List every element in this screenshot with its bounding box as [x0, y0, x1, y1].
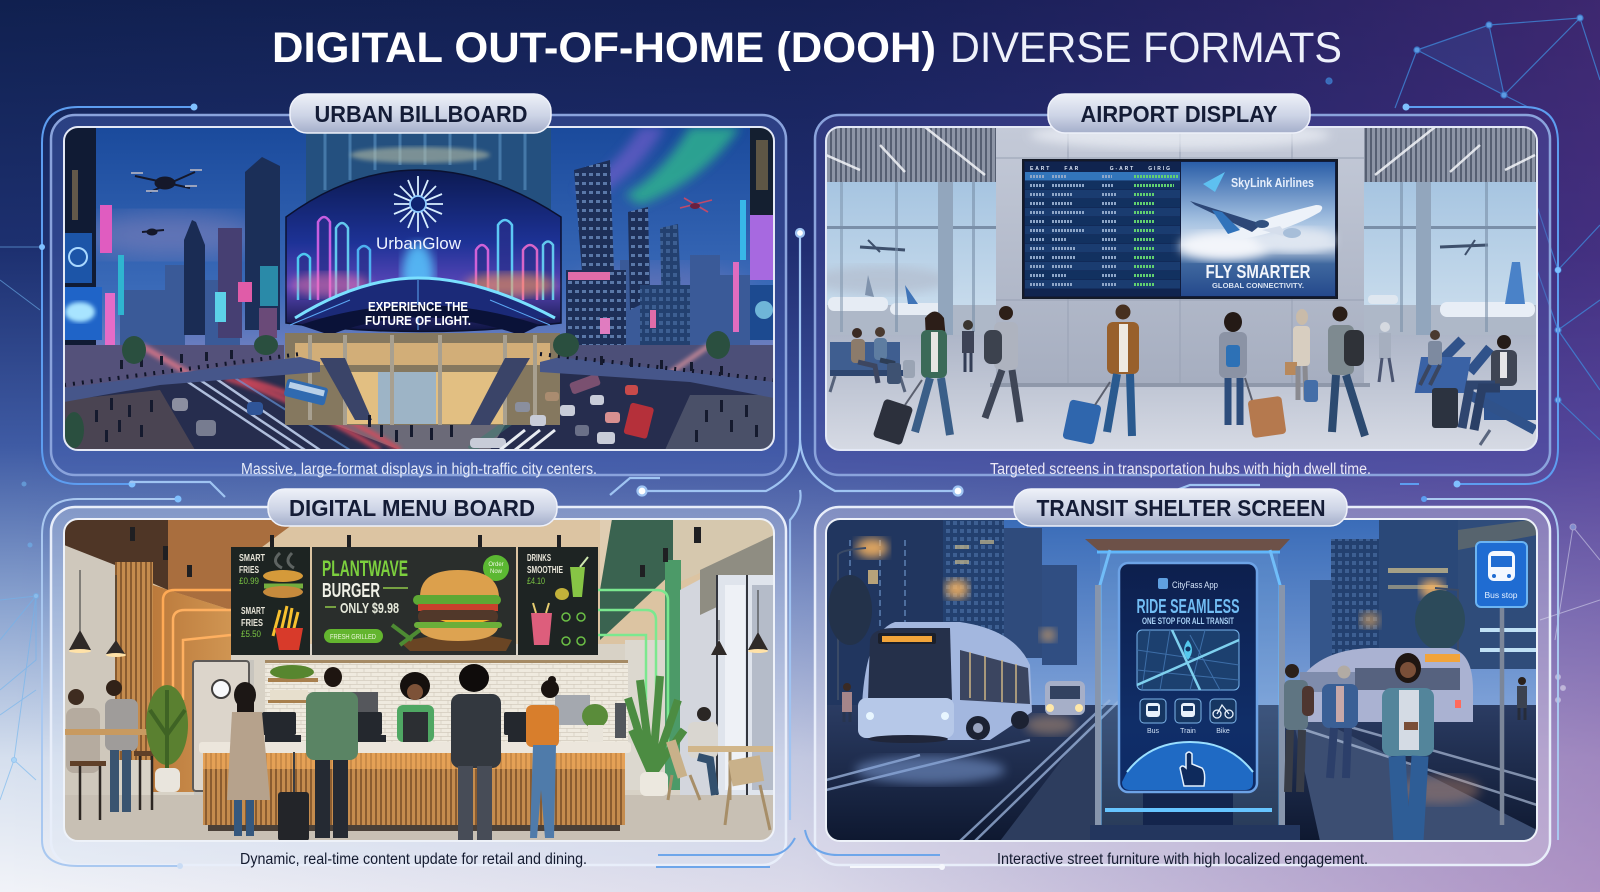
curved billboard screen — [286, 170, 561, 335]
interactive screen: ONE STOP FOR ALL TRANSIT — [1142, 616, 1234, 626]
menu board main: FRESH GRILLED — [330, 632, 376, 641]
menu board left: £5.50 — [241, 629, 261, 639]
caption: transit shelter screen: Interactive street furniture with high localized engagement. — [997, 851, 1368, 868]
network decoration: top right — [1326, 15, 1600, 440]
trees — [64, 331, 730, 448]
menu board left: FRIES — [241, 618, 263, 629]
menu board main: Order — [488, 562, 504, 568]
neon signs and side screens — [64, 200, 774, 348]
traveller: man in brown jacket — [1062, 304, 1139, 445]
neon skyline on screen — [298, 217, 553, 300]
title — [272, 24, 1342, 72]
connectors: central cross — [130, 229, 1260, 820]
city bus — [858, 622, 1032, 743]
crowds — [80, 350, 758, 442]
neon lines — [163, 590, 668, 750]
panel frame: airport display — [815, 104, 1561, 488]
customer: man green sweater — [306, 667, 358, 838]
flight table: EART FAR G-ART GIRIG — [1030, 166, 1170, 172]
bridges — [64, 354, 774, 425]
interactive screen: RIDE SEAMLESS — [1136, 596, 1240, 618]
airline ad: FLY SMARTER — [1206, 262, 1310, 282]
background pedestrian right — [1517, 677, 1527, 720]
ceiling — [64, 519, 774, 644]
title: DIVERSE FORMATS — [950, 24, 1342, 72]
airport seating left — [830, 327, 915, 392]
sky clouds and aurora — [80, 127, 750, 315]
caption: airport display: Targeted screens in transportation hubs with high dwell time. — [990, 461, 1371, 478]
customer: man dark sweater — [451, 664, 501, 840]
panel frame: digital menu board — [42, 496, 795, 869]
curved billboard screen: UrbanGlow — [376, 234, 462, 253]
register screens — [262, 712, 540, 743]
flight board screen — [1023, 160, 1337, 298]
traveller: background woman — [1285, 309, 1318, 402]
service counter — [199, 742, 631, 831]
table and chairs — [666, 739, 774, 830]
network decoration: left side — [0, 247, 42, 800]
airline ad: GLOBAL CONNECTIVITY. — [1212, 281, 1304, 290]
commuter: man with backpack — [1284, 664, 1314, 792]
airfield outside windows — [810, 240, 1537, 335]
plant right — [628, 676, 684, 796]
menu board main: Now — [490, 569, 503, 575]
mode icons: Bus — [1147, 728, 1160, 735]
street lights and trees — [828, 538, 1465, 700]
frame: billboard image edge — [64, 127, 774, 450]
menu board left: SMART — [241, 606, 265, 617]
airline ad — [1180, 162, 1335, 296]
floor — [64, 795, 774, 841]
transit map — [1137, 630, 1239, 690]
barista — [397, 672, 434, 744]
drones — [131, 170, 712, 235]
heading pill: urban billboard: URBAN BILLBOARD — [314, 101, 528, 127]
airline ad: SkyLink Airlines — [1231, 175, 1314, 190]
interactive screen: CityFass App — [1172, 580, 1218, 591]
panel: digital menu board scene — [64, 519, 774, 841]
wet road — [826, 700, 1537, 841]
mall base — [285, 333, 560, 425]
frame: airport image edge — [826, 127, 1537, 450]
heading pill: airport display: AIRPORT DISPLAY — [1080, 101, 1278, 127]
heading pill: digital menu board: DIGITAL MENU BOARD — [289, 495, 535, 521]
mode icons — [1140, 699, 1236, 735]
left and right walls — [64, 535, 774, 810]
bus stop sign — [1476, 542, 1527, 825]
title: DIGITAL OUT-OF-HOME (DOOH) — [272, 24, 936, 72]
window mullions — [826, 165, 1537, 340]
mode icons: Train — [1180, 728, 1196, 735]
airplane — [1190, 201, 1322, 240]
menu board left — [231, 547, 310, 655]
floor — [826, 335, 1537, 450]
curved billboard screen: FUTURE OF LIGHT. — [365, 314, 471, 328]
panel frame: transit shelter screen — [805, 484, 1558, 870]
menu board left: FRIES — [239, 565, 259, 576]
plaza and roads — [64, 345, 774, 450]
mode icons: Bike — [1216, 728, 1230, 735]
distant traveller right — [1379, 322, 1393, 382]
customer: woman orange top — [526, 676, 559, 838]
airport seating right — [1415, 330, 1537, 445]
heading pill: transit shelter screen — [1014, 489, 1347, 526]
menu board left: SMART — [239, 553, 265, 564]
menu board left: £0.99 — [239, 576, 259, 586]
hero burger — [392, 570, 512, 651]
pedestrian by bus — [842, 683, 852, 722]
city buildings — [826, 519, 1537, 709]
interactive screen — [1119, 563, 1257, 792]
frame: transit image edge — [826, 519, 1537, 841]
heading pill: digital menu board — [268, 489, 557, 526]
slatted ceilings — [826, 127, 1537, 182]
menu board main — [312, 547, 516, 655]
suitcase — [278, 752, 309, 841]
traveller: man with backpack — [984, 306, 1020, 422]
menu board right: DRINKS — [527, 553, 551, 564]
central tower — [306, 128, 551, 210]
frame: menu image edge — [64, 519, 774, 841]
customer: woman beige coat — [227, 682, 270, 836]
bus stop sign: Bus stop — [1484, 590, 1518, 600]
left table patrons — [64, 680, 158, 820]
right seated man — [688, 707, 718, 795]
second bus — [1300, 648, 1473, 722]
bus shelter — [1085, 539, 1300, 841]
menu board main: PLANTWAVE — [322, 556, 408, 581]
ceiling track lights — [130, 527, 701, 577]
distant car — [1045, 681, 1085, 715]
plant left — [146, 685, 188, 792]
panel: urban billboard scene — [64, 127, 774, 450]
pendant lamps — [69, 570, 768, 657]
menu board main: ONLY $9.98 — [340, 600, 399, 617]
commuter: woman with phone — [1382, 653, 1434, 841]
heading pill: airport display — [1048, 94, 1310, 133]
menu board main: BURGER — [322, 580, 380, 602]
menu board right: £4.10 — [527, 576, 545, 586]
panel frame: urban billboard — [39, 104, 786, 488]
panel: transit shelter scene — [826, 519, 1537, 841]
menu board right — [518, 547, 598, 655]
globe and hand — [1122, 742, 1253, 790]
central wall — [990, 121, 1370, 387]
panel: airport display scene — [810, 121, 1537, 450]
curved billboard screen: EXPERIENCE THE — [368, 300, 468, 314]
heading pill: transit shelter screen: TRANSIT SHELTER SCREEN — [1036, 495, 1326, 521]
network decoration: lower right — [1540, 524, 1600, 702]
commuter: older woman — [1322, 666, 1358, 778]
service door — [193, 661, 249, 791]
distant traveller left — [962, 320, 974, 372]
starburst logo — [394, 176, 443, 232]
caption: digital menu board: Dynamic, real-time content update for retail and dining. — [240, 851, 587, 868]
tiled backsplash and shelves — [193, 660, 628, 791]
small plant on counter — [582, 704, 608, 742]
menu board right: SMOOTHIE — [527, 565, 563, 576]
city towers — [64, 127, 774, 352]
traveller: man with backpack right — [1328, 306, 1365, 436]
flight table — [1025, 162, 1180, 296]
traveller: woman with tan suitcase — [1219, 312, 1286, 438]
heading pill: urban billboard — [290, 94, 551, 133]
caption: urban billboard: Massive, large-format displays in high-traffic city centers. — [241, 461, 597, 478]
distant skyline — [120, 255, 750, 350]
vehicles and traffic — [172, 373, 654, 450]
traveller: woman with suitcase — [873, 312, 950, 446]
